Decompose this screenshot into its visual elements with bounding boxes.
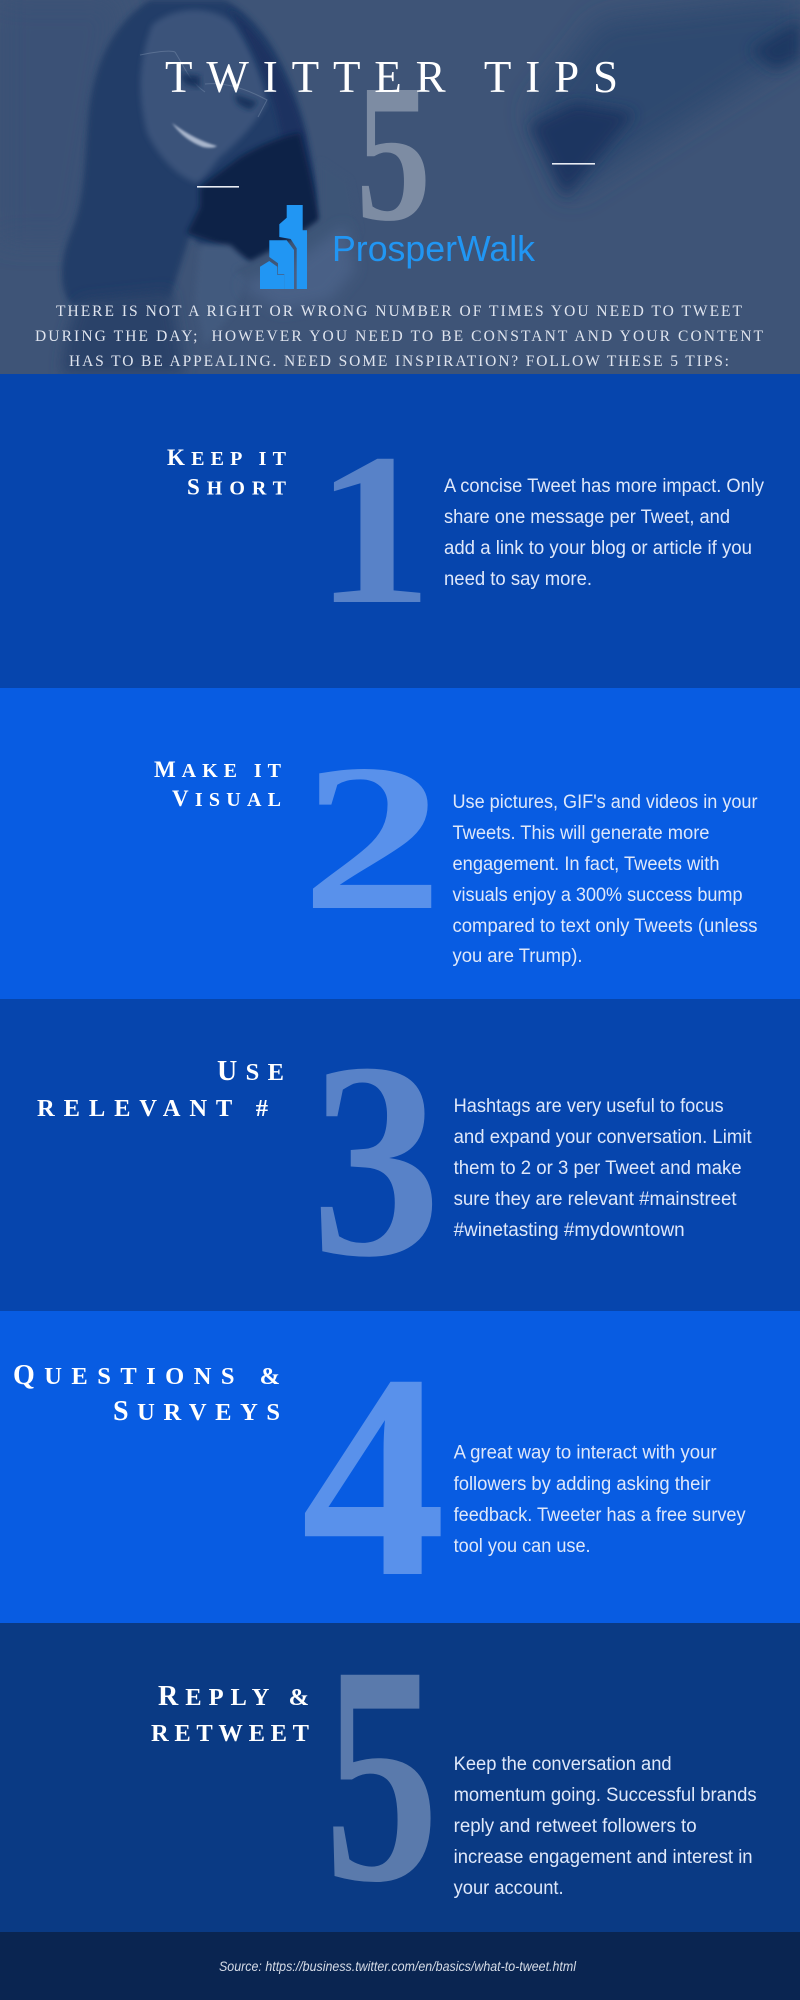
tip 5 body text: Keep the conversation and bbox=[454, 1754, 672, 1775]
panel: footer with source bbox=[0, 1932, 800, 2000]
tip 2 heading bbox=[154, 757, 282, 811]
right accent line bbox=[552, 163, 595, 165]
tip 5 body text: your account. bbox=[454, 1878, 564, 1899]
tip 2 body text: you are Trump). bbox=[452, 946, 582, 967]
tip 4 body text: feedback. Tweeter has a free survey bbox=[454, 1505, 746, 1526]
hand and phone bbox=[248, 203, 324, 266]
background photo: woman looking at phone, blue duotone bbox=[0, 0, 800, 374]
panel: tip 5 bbox=[0, 1602, 800, 1947]
tip 1 heading: K EEP IT bbox=[167, 445, 287, 470]
intro paragraph: THERE IS NOT A RIGHT OR WRONG NUMBER OF TIMES YOU NEED TO TWEET bbox=[56, 303, 743, 320]
tip 4 body text: followers by adding asking their bbox=[454, 1474, 711, 1495]
panel: tip 1 bbox=[0, 374, 800, 688]
panel: header with photo bbox=[0, 0, 800, 374]
tip 3 body text: sure they are relevant #mainstreet bbox=[454, 1189, 737, 1210]
tip 5 body text: momentum going. Successful brands bbox=[454, 1785, 757, 1806]
tip 1 body text bbox=[444, 476, 764, 590]
tip 3 heading: RELEVANT # bbox=[37, 1095, 268, 1122]
tip 2 body text: compared to text only Tweets (unless bbox=[452, 916, 758, 937]
tip 1 body text: A concise Tweet has more impact. Only bbox=[444, 476, 764, 497]
numeral 4: 4 bbox=[301, 1314, 446, 1637]
neck shadow bbox=[187, 133, 320, 263]
tip 4 body text: tool you can use. bbox=[454, 1536, 591, 1557]
tip 5 heading: R EPLY & bbox=[158, 1681, 309, 1712]
tip 3 heading bbox=[37, 1056, 284, 1122]
glasses bbox=[140, 51, 267, 117]
tip 1 body text: add a link to your blog or article if you bbox=[444, 538, 752, 559]
tip 2 body text: Tweets. This will generate more bbox=[452, 823, 710, 844]
eyes bbox=[180, 74, 200, 88]
tip 5 heading bbox=[151, 1681, 309, 1747]
numeral 3: 3 bbox=[311, 1005, 441, 1315]
tip 5 body text: reply and retweet followers to bbox=[454, 1816, 697, 1837]
intro paragraph: HAS TO BE APPEALING. NEED SOME INSPIRATION? FOLLOW THESE 5 TIPS: bbox=[69, 353, 729, 370]
tip 5 heading: RETWEET bbox=[151, 1720, 309, 1747]
tip 3 body text bbox=[454, 1096, 752, 1241]
tip 3 body text: them to 2 or 3 per Tweet and make bbox=[454, 1158, 742, 1179]
tip 2 body text bbox=[452, 792, 758, 967]
tip 3 body text: Hashtags are very useful to focus bbox=[454, 1096, 724, 1117]
tip 3 heading: U SE bbox=[217, 1056, 284, 1087]
right hair strand bbox=[239, 22, 310, 152]
numeral 5: 5 bbox=[324, 1602, 439, 1947]
numeral 2: 2 bbox=[301, 722, 443, 954]
tip 1 body text: share one message per Tweet, and bbox=[444, 507, 730, 528]
face bbox=[140, 10, 267, 183]
tip 5 body text: increase engagement and interest in bbox=[454, 1847, 753, 1868]
tip 4 body text: A great way to interact with your bbox=[454, 1442, 717, 1464]
tip 4 heading: S URVEYS bbox=[113, 1396, 280, 1427]
tip 2 body text: Use pictures, GIF's and videos in your bbox=[452, 792, 758, 813]
tip 4 heading: Q UESTIONS & bbox=[13, 1360, 280, 1391]
panel: tip 4 bbox=[0, 1311, 800, 1637]
tip 1 heading: S HORT bbox=[187, 474, 287, 500]
tip 4 heading bbox=[13, 1360, 280, 1427]
intro paragraph bbox=[35, 303, 764, 370]
left accent line bbox=[197, 186, 239, 188]
tip 1 body text: need to say more. bbox=[444, 569, 592, 590]
tip 1 heading bbox=[167, 445, 287, 500]
panel: tip 3 bbox=[0, 999, 800, 1315]
tip 4 body text bbox=[454, 1442, 746, 1557]
smile bbox=[172, 123, 217, 148]
tip 2 heading: V ISUAL bbox=[172, 786, 281, 811]
logo wordmark: ProsperWalk bbox=[332, 228, 536, 269]
collar and shirt bbox=[201, 242, 248, 264]
tip 3 body text: #winetasting #mydowntown bbox=[454, 1220, 685, 1241]
tip 2 heading: M AKE IT bbox=[154, 757, 282, 782]
numeral 1: 1 bbox=[315, 408, 432, 649]
tip 2 body text: visuals enjoy a 300% success bump bbox=[452, 885, 742, 906]
intro paragraph: DURING THE DAY; HOWEVER YOU NEED TO BE CONSTANT AND YOUR CONTENT bbox=[35, 328, 764, 345]
tip 5 body text bbox=[454, 1754, 757, 1899]
source citation: Source: https://business.twitter.com/en/basics/what-to-tweet.html bbox=[219, 1958, 577, 1974]
tip 3 body text: and expand your conversation. Limit bbox=[454, 1127, 752, 1148]
hair bbox=[62, 0, 320, 305]
panel: tip 2 bbox=[0, 688, 800, 999]
icon: ProsperWalk buildings logo bbox=[260, 205, 307, 289]
big faded numeral 5: 5 bbox=[356, 43, 431, 262]
tip 2 body text: engagement. In fact, Tweets with bbox=[452, 854, 720, 875]
title: TWITTER TIPS bbox=[165, 52, 618, 102]
